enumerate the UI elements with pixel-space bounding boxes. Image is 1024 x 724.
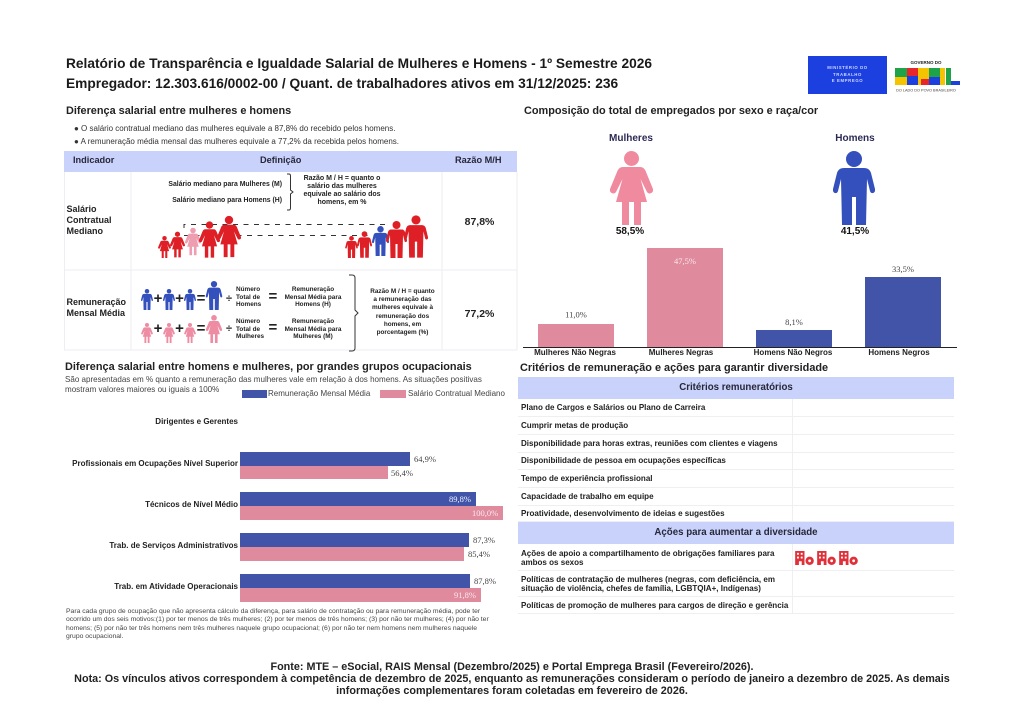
- bar chart: sex and race: 11,0%: [565, 310, 587, 320]
- text: mean ratio definition: Razão M / H = quanto: [370, 288, 435, 295]
- action 2: [518, 571, 954, 597]
- text block: summary bullets: ● O salário contratual mediano das mulheres equivale a 87,8% do recebido pelos homens.: [74, 124, 395, 133]
- logo: Ministério do Trabalho e Emprego: TRABALHO: [833, 72, 862, 76]
- text: median labels: [168, 180, 282, 204]
- criterion 5: [518, 470, 954, 488]
- source and note: Fonte: MTE – eSocial, RAIS Mensal (Dezembro/2025) e Portal Emprega Brasil (Fevereiro/2026).: [270, 661, 754, 673]
- formula: women's mean pay: =: [197, 320, 206, 337]
- row label: Remuneração Mensal Média: Remuneração Mensal Média: [66, 297, 126, 318]
- text: mean ratio definition: mulheres equivale à: [372, 304, 433, 311]
- text: median labels: Salário mediano para Homens (H): [172, 197, 282, 204]
- table grid: [64, 172, 518, 350]
- text block: summary bullets: ● A remuneração média mensal das mulheres equivale a 77,2% da recebida pelos homens.: [74, 137, 399, 146]
- logo: Governo do Brasil: [895, 60, 960, 92]
- criterion 7: Proatividade, desenvolvimento de ideias e sugestões: [521, 509, 725, 518]
- label: Homens: Homens: [835, 132, 875, 144]
- bar chart: occupational groups: Técnicos de Nível Médio: [145, 500, 238, 508]
- legend: [242, 388, 505, 398]
- logo: Ministério do Trabalho e Emprego: MINISTÉRIO DO: [827, 65, 868, 70]
- legend: Salário Contratual Mediano: [408, 388, 505, 398]
- formula: men's mean pay: +: [154, 290, 163, 307]
- bar chart: occupational groups: Dirigentes e Gerentes: [155, 417, 238, 426]
- text: median ratio definition: Razão M / H = quanto o: [304, 175, 380, 182]
- formula: men's mean pay: Homens (H): [295, 301, 331, 308]
- criterion 3: [518, 434, 954, 452]
- formula: men's mean pay: =: [268, 288, 277, 305]
- bar chart: occupational groups: Trab. em Atividade Operacionais: [114, 582, 238, 590]
- footnote: [66, 608, 489, 640]
- text: median labels: Salário mediano para Mulheres (M): [168, 181, 282, 188]
- bar chart: occupational groups: 100,0%: [472, 508, 498, 518]
- formula: women's mean pay: Remuneração: [292, 318, 334, 325]
- bar chart: sex and race: 33,5%: [892, 264, 914, 274]
- label: Mulheres: Mulheres: [609, 132, 653, 144]
- criterion 7: [518, 505, 954, 522]
- logo: Governo do Brasil: DO LADO DO POVO BRASILEIRO: [896, 88, 956, 92]
- formula: men's mean pay: Mensal Média para: [285, 294, 341, 301]
- column divider: [792, 399, 793, 613]
- source and note: [74, 661, 950, 697]
- bar chart: occupational groups: 85,4%: [468, 549, 490, 559]
- heading: occupational difference: Diferença salarial entre homens e mulheres, por grandes grupos ocupacionais: [65, 360, 472, 372]
- logo: Governo do Brasil: GOVERNO DO: [910, 60, 942, 65]
- logo: Ministério do Trabalho e Emprego: E EMPREGO: [832, 78, 863, 83]
- bar chart: occupational groups: 91,8%: [454, 590, 476, 600]
- footnote: grupo ocupacional.: [66, 633, 123, 640]
- row label: Salário Contratual Mediano: Salário Contratual Mediano: [66, 204, 112, 236]
- criterion 3: Disponibilidade para horas extras, reuniões com clientes e viagens: [521, 438, 778, 448]
- bar chart: occupational groups: Trab. de Serviços Administrativos: [109, 540, 238, 550]
- action 1: Ações de apoio a compartilhamento de obrigações familiares para: [521, 548, 775, 558]
- text: mean ratio definition: remuneração dos: [376, 313, 429, 320]
- bar chart: sex and race: 8,1%: [785, 317, 803, 327]
- heading: composition: Composição do total de empregados por sexo e raça/cor: [524, 105, 818, 117]
- icon: woman pink: [610, 151, 653, 225]
- criterion 2: Cumprir metas de produção: [521, 421, 628, 430]
- bar chart: occupational groups: Profissionais em Ocupações Nível Superior: [72, 458, 238, 468]
- bar chart: sex and race: Homens Não Negros: [754, 348, 833, 357]
- text: mean ratio definition: a remuneração das: [373, 296, 432, 303]
- action 2: situação de violência, chefes de família, LGBTQIA+, Indígenas): [521, 584, 761, 593]
- bar chart: occupational groups: 87,8%: [474, 576, 496, 586]
- table header: [64, 151, 517, 172]
- text: median ratio definition: salário das mulheres: [307, 183, 377, 190]
- heading: criteria: Critérios de remuneração e ações para garantir diversidade: [520, 362, 828, 374]
- text: mean ratio definition: homens, em: [384, 321, 421, 328]
- panel: workforce composition: [523, 105, 957, 357]
- bar chart: sex and race: Homens Negros: [868, 348, 930, 357]
- criterion 1: Plano de Cargos e Salários ou Plano de Carreira: [521, 403, 705, 412]
- text: median ratio definition: homens, em %: [317, 199, 366, 206]
- icon: large bracket: [349, 274, 359, 352]
- bar chart: sex and race: [523, 248, 957, 357]
- criterion 1: [518, 399, 954, 417]
- table header: Indicador: [73, 155, 114, 165]
- bar chart: occupational groups: 56,4%: [391, 468, 413, 478]
- text: median ratio definition: equivale ao salário dos: [303, 191, 381, 198]
- value: 87,8%: 87,8%: [465, 216, 494, 228]
- table header: diversity actions: Ações para aumentar a diversidade: [654, 527, 818, 538]
- criterion 2: [518, 417, 954, 435]
- criterion 6: Capacidade de trabalho em equipe: [521, 492, 654, 500]
- formula: women's mean pay: =: [268, 319, 277, 336]
- criterion 4: [518, 452, 954, 470]
- text: mean ratio definition: [370, 288, 435, 336]
- chart: median line of people: [158, 215, 428, 258]
- source and note: informações complementares foram coletadas em fevereiro de 2026.: [336, 685, 688, 697]
- criterion 5: Tempo de experiência profissional: [521, 474, 653, 483]
- table header: criteria: [518, 377, 954, 399]
- formula: men's mean pay: [141, 281, 342, 310]
- action 1: ambos os sexos: [521, 558, 584, 567]
- title: Empregador: 12.303.616/0002-00 / Quant. de trabalhadores ativos em 31/12/2025: 236: [66, 76, 618, 91]
- footnote: Para cada grupo de ocupação que não apresenta cálculo da diferença, para salário de contratação ou para remuneração média, pode ter: [66, 608, 480, 615]
- icons: actions in place: [795, 551, 858, 565]
- title: Relatório de Transparência e Igualdade Salarial de Mulheres e Homens - 1º Semestre 2026: [66, 56, 652, 71]
- formula: women's mean pay: [141, 315, 342, 343]
- table header: criteria: Critérios remuneratórios: [679, 382, 793, 393]
- icon: bracket: [287, 174, 294, 210]
- source and note: Nota: Os vínculos ativos correspondem à competência de dezembro de 2025, enquanto as remunerações consideram o período de janeiro a dezembro de 2025. As demais: [74, 673, 950, 685]
- table header: Razão M/H: [455, 155, 501, 165]
- formula: women's mean pay: Número: [236, 318, 260, 325]
- panel: salary difference: [64, 104, 518, 352]
- footnote: ocorrido um dos seis motivos:(1) por ter menos de três mulheres; (2) por ter menos de três homens; (3) por não ter mulheres; (4) por não ter: [66, 616, 489, 623]
- formula: women's mean pay: +: [154, 320, 163, 337]
- value: 41,5%: 41,5%: [841, 226, 869, 236]
- table header: Definição: [260, 155, 301, 165]
- bar chart: sex and race: 47,5%: [674, 256, 696, 266]
- formula: women's mean pay: Mensal Média para: [285, 326, 341, 333]
- value: 77,2%: 77,2%: [465, 308, 494, 320]
- text: median ratio definition: [303, 174, 381, 206]
- criterion 4: Disponibilidade de pessoa em ocupações específicas: [521, 456, 726, 465]
- formula: men's mean pay: Remuneração: [292, 286, 334, 293]
- icon: man blue: [833, 151, 875, 225]
- formula: women's mean pay: Mulheres (M): [293, 333, 333, 340]
- text: mean ratio definition: porcentagem (%): [377, 329, 428, 336]
- footnote: homens; (5) por não ter três homens nem três mulheres naquele grupo ocupacional; (6) por não ter nem homens nem mulheres naquele: [66, 625, 477, 632]
- panel: occupational groups: [65, 360, 505, 640]
- formula: men's mean pay: Número: [236, 286, 260, 293]
- legend: Remuneração Mensal Média: [268, 388, 370, 398]
- action 3: [518, 597, 954, 614]
- criterion 6: [518, 488, 954, 506]
- bar chart: sex and race: Mulheres Não Negras: [534, 348, 616, 357]
- bar chart: occupational groups: 64,9%: [414, 454, 436, 464]
- title: [66, 56, 652, 91]
- formula: women's mean pay: ÷: [226, 323, 232, 335]
- heading: salary difference: Diferença salarial entre mulheres e homens: [66, 104, 291, 116]
- bar chart: sex and race: Mulheres Negras: [649, 348, 714, 357]
- text block: chart description: [65, 375, 482, 394]
- formula: men's mean pay: ÷: [226, 293, 232, 305]
- text block: summary bullets: [74, 124, 399, 146]
- text block: chart description: São apresentadas em % quanto a remuneração das mulheres vale em relação à dos homens. As situações positivas: [65, 375, 482, 384]
- formula: women's mean pay: +: [175, 320, 184, 337]
- formula: women's mean pay: Total de: [236, 326, 260, 333]
- formula: women's mean pay: Mulheres: [236, 333, 264, 340]
- bar chart: occupational groups: 89,8%: [449, 494, 471, 504]
- formula: men's mean pay: +: [175, 290, 184, 307]
- table header: diversity actions: [518, 522, 954, 544]
- formula: men's mean pay: Homens: [236, 301, 261, 308]
- text block: chart description: mostram valores maiores ou iguais a 100%: [65, 384, 219, 394]
- action 3: Políticas de promoção de mulheres para cargos de direção e gerência: [521, 601, 788, 610]
- logo: Ministério do Trabalho e Emprego: [808, 56, 887, 94]
- formula: men's mean pay: Total de: [236, 294, 260, 301]
- action 1: [518, 544, 954, 571]
- action 2: Políticas de contratação de mulheres (negras, com deficiência, em: [521, 574, 775, 584]
- bar chart: occupational groups: [72, 417, 503, 602]
- bar chart: occupational groups: 87,3%: [473, 535, 495, 545]
- formula: men's mean pay: =: [197, 290, 206, 307]
- value: 58,5%: 58,5%: [616, 226, 644, 236]
